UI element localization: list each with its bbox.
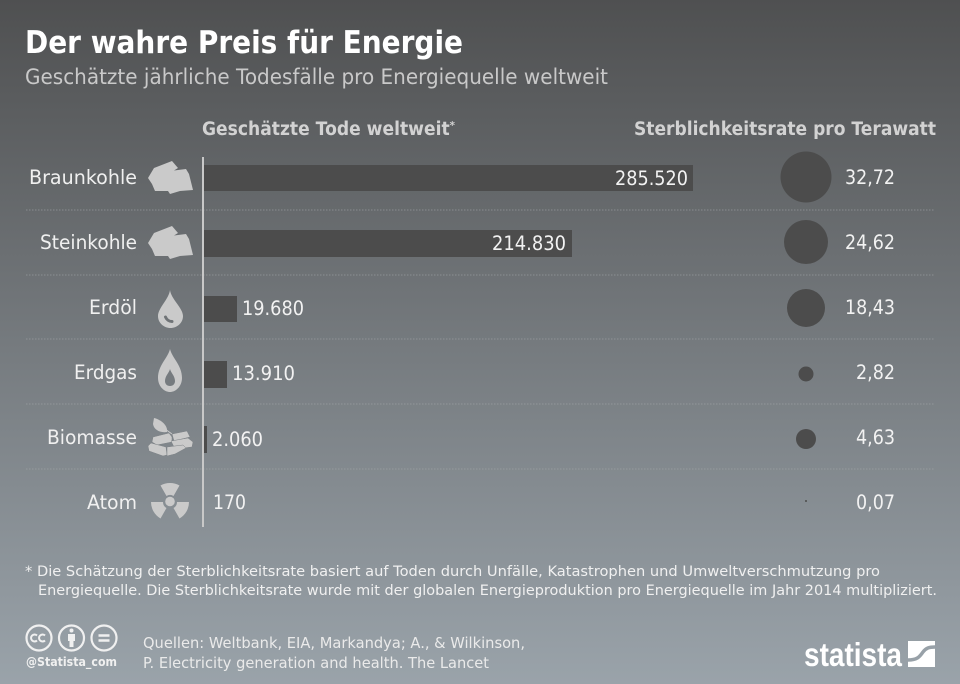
sources: Quellen: Weltbank, EIA, Markandya; A., & Wilkinson, xyxy=(143,634,525,652)
footnote: * Die Schätzung der Sterblichkeitsrate basiert auf Toden durch Unfälle, Katastrophen und Umweltverschmutzung pro xyxy=(25,564,880,580)
row labels: Erdgas xyxy=(74,361,137,384)
mortality rate values: 18,43 xyxy=(845,296,895,319)
statista logo: statista xyxy=(804,636,903,673)
subtitle: Geschätzte jährliche Todesfälle pro Energiequelle weltweit xyxy=(25,65,608,90)
icon: radiation xyxy=(149,483,191,520)
bar chart: estimated deaths: 214.830 xyxy=(492,232,566,255)
mortality rate values: 2,82 xyxy=(856,361,895,384)
mortality rate values: 4,63 xyxy=(856,426,895,449)
icon: hard coal xyxy=(148,226,193,259)
bar chart: estimated deaths: 170 xyxy=(213,491,246,514)
icon: lignite xyxy=(148,161,193,194)
row labels: Biomasse xyxy=(47,426,137,449)
footnote xyxy=(25,564,937,599)
column heading: deaths: * xyxy=(450,119,455,132)
icon: creative commons xyxy=(26,626,116,650)
mortality rate values: 24,62 xyxy=(845,231,895,254)
mortality rate values xyxy=(845,166,895,514)
row labels: Atom xyxy=(87,491,137,514)
icon: biomass xyxy=(148,418,193,456)
sources xyxy=(143,634,525,672)
mortality rate values: 32,72 xyxy=(845,166,895,189)
social handle: @Statista_com xyxy=(26,654,117,670)
icon: gas flame xyxy=(158,349,182,392)
bar chart: estimated deaths: 285.520 xyxy=(615,167,688,190)
footnote: Energiequelle. Die Sterblichkeitsrate wurde mit der globalen Energieproduktion pro Energiequelle im Jahr 2014 multipliziert. xyxy=(38,583,937,599)
column heading: mortality rate: Sterblichkeitsrate pro Terawatt xyxy=(634,119,936,140)
bar chart: estimated deaths xyxy=(204,165,693,514)
bubble chart: mortality rate xyxy=(780,152,832,502)
bar chart: estimated deaths: 13.910 xyxy=(232,362,295,385)
title: Der wahre Preis für Energie xyxy=(25,25,463,61)
row labels: Erdöl xyxy=(89,296,137,319)
row labels xyxy=(29,166,137,514)
sources: P. Electricity generation and health. The Lancet xyxy=(143,654,489,672)
row labels: Braunkohle xyxy=(29,166,137,189)
mortality rate values: 0,07 xyxy=(856,491,895,514)
bar chart: estimated deaths: 19.680 xyxy=(242,297,304,320)
row labels: Steinkohle xyxy=(40,231,137,254)
column heading: deaths: Geschätzte Tode weltweit xyxy=(202,119,470,140)
bar chart: estimated deaths: 2.060 xyxy=(212,428,263,451)
icon: oil drop xyxy=(158,290,183,328)
